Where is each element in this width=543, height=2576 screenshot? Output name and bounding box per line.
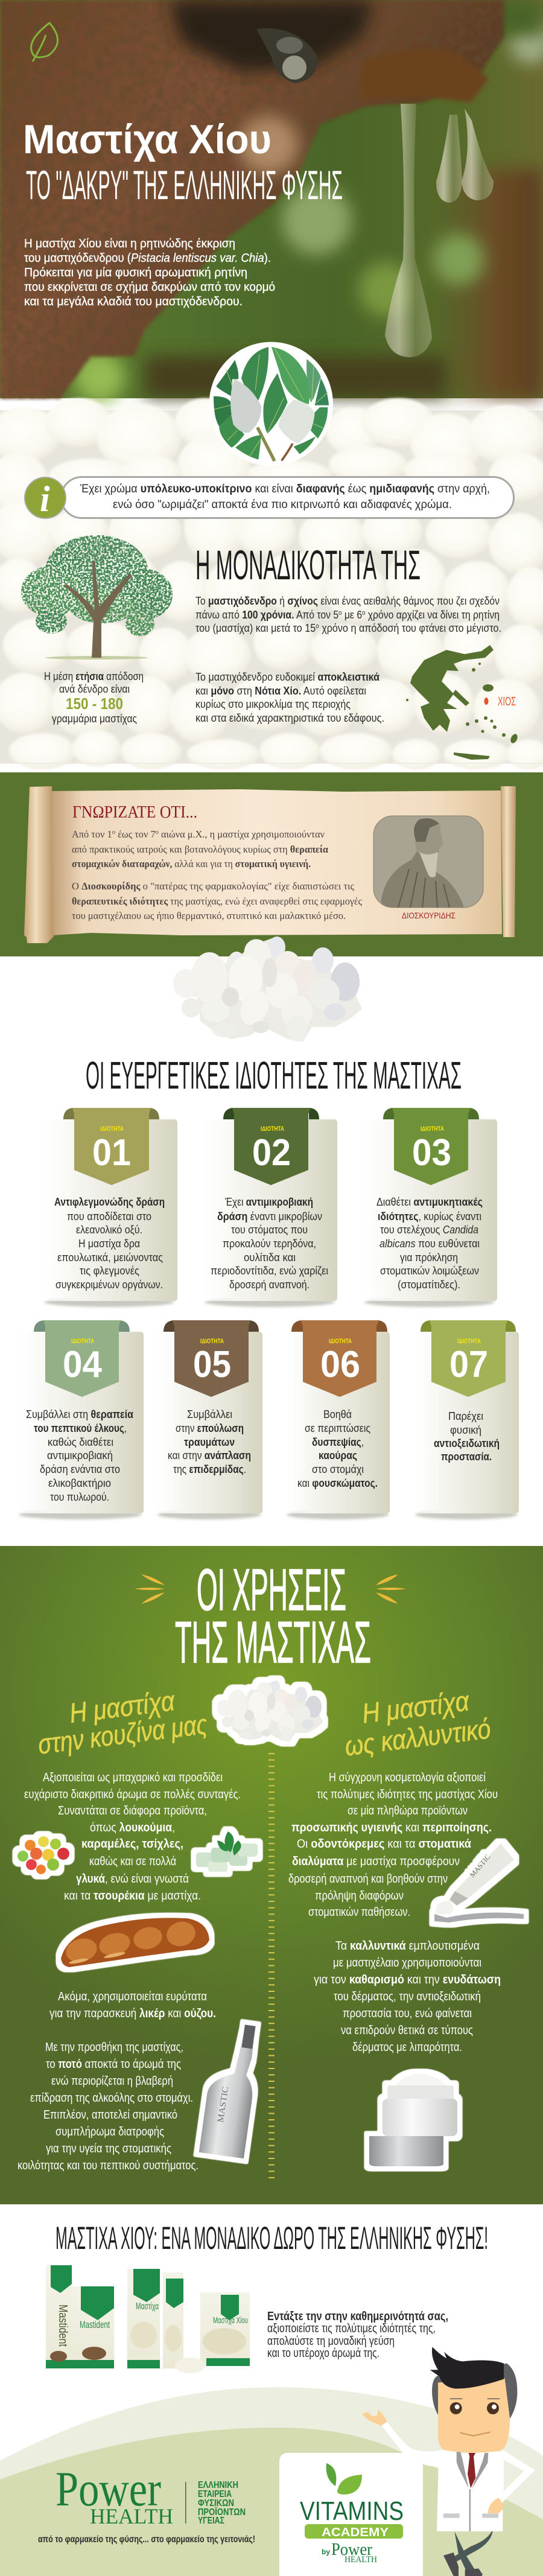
card 02: περιοδοντίτιδα, ενώ χαρίζει xyxy=(211,1265,328,1277)
card 04: ΙΔΙΟΤΗΤΑ xyxy=(71,1338,94,1345)
card 06: Βοηθά xyxy=(323,1408,352,1420)
call-to-action text: αξιοποιείστε τις πολύτιμες ιδιότητές της, xyxy=(267,2322,436,2335)
card 03: στοματικών λοιμώξεων xyxy=(380,1265,479,1277)
card 02: Έχει αντιμικροβιακή xyxy=(224,1196,313,1208)
Chios paragraph: Το μαστιχόδενδρο ευδοκιμεί αποκλειστικά xyxy=(195,671,379,683)
cosmetics text block: δέρματος με λιπαρότητα. xyxy=(352,2041,462,2054)
tree yield caption: ανά δένδρο είναι xyxy=(59,683,130,695)
kitchen text block: καθώς και σε πολλά xyxy=(89,1855,176,1868)
card 04: του πυλωρού. xyxy=(50,1491,109,1503)
card 02: δροσερή αναπνοή. xyxy=(229,1279,310,1291)
card 01: που αποδίδεται στο xyxy=(67,1210,151,1223)
product boxes: Μαστίχα xyxy=(136,2301,159,2312)
icon: cream jar xyxy=(369,2074,457,2166)
card 02: του στόματος που xyxy=(231,1224,308,1236)
card 04: του πεπτικού έλκους, xyxy=(34,1422,127,1434)
Power Health logo: ΕΤΑΙΡΕΙΑ xyxy=(198,2489,232,2499)
Vitamins Academy panel: Pοwer xyxy=(331,2540,372,2559)
cosmetics text block: προσωπικής υγιεινής και περιποίησης. xyxy=(291,1821,492,1834)
parchment scroll: ο xyxy=(112,828,115,836)
card 07: φυσική xyxy=(450,1424,481,1436)
kitchen text block: ενώ περιορίζεται η βλαβερή xyxy=(51,2075,173,2088)
card 03: Διαθέτει αντιμυκητιακές xyxy=(376,1196,483,1208)
card 04: Συμβάλλει στη θεραπεία xyxy=(26,1408,133,1420)
card 05: Συμβάλλει xyxy=(187,1408,232,1420)
tree yield caption: 150 - 180 xyxy=(66,695,123,713)
kitchen text block: και τα τσουρέκια με μαστίχα. xyxy=(64,1889,201,1903)
icon: tsoureki bread xyxy=(61,1918,209,1967)
card 01: ΙΔΙΟΤΗΤΑ xyxy=(100,1125,124,1133)
cosmetics text block xyxy=(288,1771,501,2054)
card 06: σε περιπτώσεις xyxy=(305,1422,370,1434)
kitchen text block: όπως λουκούμια, xyxy=(90,1821,175,1834)
Vitamins Academy panel: by xyxy=(322,2548,330,2556)
info callout pill: i xyxy=(40,479,50,519)
parchment scroll: Ο Διοσκουρίδης ο "πατέρας της φαρμακολογίας" είχε διαπιστώσει τις xyxy=(72,880,354,892)
kitchen text block: Αξιοποιείται ως μπαχαρικό και προσδίδει xyxy=(43,1771,223,1784)
cosmetics text block: με μαστιχέλαιο χρησιμοποιούνται xyxy=(333,1956,481,1970)
cosmetics text block: Οι οδοντόκρεμες και τα στοματικά xyxy=(297,1837,472,1851)
cosmetics text block: για τον καθαρισμό και την ενυδάτωση xyxy=(314,1973,501,1986)
card 01: ελεανολικό οξύ. xyxy=(76,1224,142,1236)
icon: chewing gum and mint xyxy=(196,1831,258,1872)
cosmetics text block: τις πολύτιμες ιδιότητες της μαστίχας Χίου xyxy=(317,1788,498,1801)
cosmetics text block: σε μία πληθώρα προϊόντων xyxy=(348,1804,468,1818)
product boxes: Mastident xyxy=(80,2319,110,2330)
Power Health logo: Pοwer xyxy=(56,2461,161,2516)
handwritten title: cosmetic: ως καλλυντικό xyxy=(343,1713,492,1762)
kitchen text block: ευχάριστο διακριτικό άρωμα σε πολλές συνταγές. xyxy=(24,1788,241,1801)
decorative yellow rays xyxy=(135,1574,406,1604)
kitchen text block: το ποτό αποκτά το άρωμά της xyxy=(46,2058,181,2071)
card 04: αντιμικροβιακή xyxy=(47,1449,113,1461)
call-to-action text: και το υπέροχο άρωμά της. xyxy=(267,2347,379,2360)
uniqueness paragraph: Το μαστιχόδενδρο ή σχίνος είναι ένας αειθαλής θάμνος που ζει σχεδόν xyxy=(195,595,500,607)
Vitamins Academy panel: HEALTH xyxy=(345,2555,377,2565)
card 02: προκαλούν τερηδόνα, xyxy=(223,1238,316,1250)
Power Health logo: ΠΡΟΪΟΝΤΩΝ xyxy=(198,2507,246,2517)
map of Greece: ΧΙΟΣ xyxy=(498,695,516,708)
call-to-action text: Εντάξτε την στην καθημερινότητά σας, xyxy=(267,2310,448,2323)
card 04: καθώς διαθέτει xyxy=(48,1436,113,1448)
icon: leaves and mastic crystals circle xyxy=(209,342,333,466)
kitchen text block: Με την προσθήκη της μαστίχας, xyxy=(45,2041,183,2054)
card 03: albicans που ευθύνεται xyxy=(379,1238,480,1250)
card 07: αντιοξειδωτική xyxy=(434,1437,500,1450)
Vitamins Academy panel xyxy=(279,2453,423,2576)
mastic pile sticker xyxy=(217,1680,323,1741)
card 05: και στην ανάπλαση xyxy=(168,1449,251,1461)
mastic texture background xyxy=(0,398,543,769)
icon: toothpaste tube and brush: MASTIC xyxy=(468,1852,492,1879)
card 05 xyxy=(156,1320,262,1519)
tree yield caption: Η μέση ετήσια απόδοση xyxy=(44,670,144,682)
uniqueness paragraph: με 6 xyxy=(342,609,362,621)
card 07: προστασία. xyxy=(441,1451,492,1463)
Power Health logo: HEALTH xyxy=(90,2504,173,2528)
kitchen text block: για την παρασκευή λικέρ και ούζου. xyxy=(49,2007,216,2020)
info callout pill: ενώ όσο "ωριμάζει" αποκτά ένα πιο κιτρινωπό και αδιαφανές χρώμα. xyxy=(113,498,452,511)
uniqueness paragraph xyxy=(195,595,501,634)
tagline: από το φαρμακείο της φύσης... στο φαρμακείο της γειτονιάς! xyxy=(38,2534,255,2545)
card 01: επουλωτικά, μειώνοντας xyxy=(57,1251,163,1264)
kitchen text block: επίδραση της αλκοόλης στο στομάχι. xyxy=(30,2091,193,2105)
uniqueness paragraph: ο xyxy=(316,623,319,630)
hero intro paragraph xyxy=(24,237,275,308)
product boxes: Mastident xyxy=(56,2304,69,2347)
icon: liqueur bottle: MASTIC xyxy=(216,2086,230,2123)
footer hills xyxy=(0,2387,543,2576)
icon: leaf logo xyxy=(31,23,58,62)
parchment scroll: αιώνα μ.Χ., η μαστίχα χρησιμοποιούνταν xyxy=(159,828,325,840)
card 03 xyxy=(361,1108,497,1307)
card 05: τραυμάτων xyxy=(184,1436,235,1448)
cosmetics text block: διαλύματα με μαστίχα προσφέρουν xyxy=(292,1855,460,1868)
hero title: Μαστίχα Χίου xyxy=(23,116,272,162)
card 03: 03 xyxy=(412,1132,451,1174)
card 04: δράση ενάντια στο xyxy=(40,1463,120,1475)
handwritten title: kitchen: στην κουζίνα μας xyxy=(36,1708,209,1760)
uniqueness paragraph: του (μαστίχα) και μετά το 15 xyxy=(195,622,329,634)
handwritten title: kitchen xyxy=(33,1681,209,1760)
central dashed divider xyxy=(268,1753,275,2178)
card 03: ΙΔΙΟΤΗΤΑ xyxy=(421,1125,444,1133)
map of Greece xyxy=(406,645,519,760)
card 01: Η μαστίχα δρα xyxy=(78,1238,140,1250)
Power Health logo: ΕΛΛΗΝΙΚΗ xyxy=(198,2480,238,2490)
parchment scroll: Από τον 1 xyxy=(72,828,113,840)
green uses panel xyxy=(0,1546,543,2204)
cosmetics text block: στοματικών παθήσεων. xyxy=(308,1906,410,1919)
card 07: ΙΔΙΟΤΗΤΑ xyxy=(457,1338,481,1345)
icon: mastic tree xyxy=(21,535,173,660)
card 02: δράση έναντι μικροβίων xyxy=(217,1210,322,1223)
portrait of Dioscorides: ΔΙΟΣΚΟΥΡΙΔΗΣ xyxy=(402,911,456,920)
card 05: ΙΔΙΟΤΗΤΑ xyxy=(200,1338,224,1345)
Chios paragraph: κυρίως στο μικροκλίμα της περιοχής xyxy=(195,698,351,710)
portrait of Dioscorides xyxy=(373,816,483,920)
info callout pill: Έχει χρώμα υπόλευκο-υποκίτρινο και είναι διαφανής έως ημιδιαφανής στην αρχή, xyxy=(80,483,490,495)
card 02 xyxy=(202,1108,337,1307)
Vitamins Academy panel: ACADEMY xyxy=(322,2526,389,2539)
parchment scroll: ΓΝΩΡΙΖΑΤΕ ΟΤΙ... xyxy=(72,803,197,822)
parchment scroll: έως τον 7 xyxy=(115,828,156,840)
kitchen text block: Συναντάται σε διάφορα προϊόντα, xyxy=(58,1804,207,1818)
cosmetics text block: Τα καλλυντικά εμπλουτισμένα xyxy=(335,1939,480,1953)
hero intro paragraph: Η μαστίχα Χίου είναι η ρητινώδης έκκριση xyxy=(24,237,235,250)
hero intro paragraph: και τα μεγάλα κλαδιά του μαστιχόδενδρου. xyxy=(24,295,243,308)
kitchen text block: για την υγεία της στοματικής xyxy=(46,2142,171,2155)
Vitamins Academy panel: VITAMINS xyxy=(300,2496,404,2526)
cosmetics text block: Η σύγχρονη κοσμετολογία αξιοποιεί xyxy=(329,1771,486,1784)
info callout pill xyxy=(25,477,514,519)
call-to-action text: απολαύστε τη μοναδική γεύση xyxy=(267,2335,395,2348)
card 06: 06 xyxy=(320,1344,360,1385)
handwritten title: cosmetic: Η μαστίχα xyxy=(360,1685,472,1729)
cosmetics text block: προστασία του, ενώ φαίνεται xyxy=(343,2007,472,2020)
card 01: τις φλεγμονές xyxy=(80,1265,139,1277)
hero intro paragraph: του μαστιχόδενδρου (Pistacia lentiscus var. Chia). xyxy=(24,252,271,265)
kitchen text block xyxy=(17,1771,241,2172)
kitchen text block: Επιπλέον, αποτελεί σημαντικό xyxy=(43,2108,177,2122)
icon: resin drops xyxy=(256,28,494,357)
Power Health logo: ΥΓΕΙΑΣ xyxy=(198,2516,224,2526)
Chios paragraph: και μόνο στη Νότια Χίο. Αυτό οφείλεται xyxy=(195,685,366,697)
mastic pile photo xyxy=(173,935,362,1042)
card 07: Παρέχει xyxy=(448,1410,483,1422)
card 06 xyxy=(285,1320,390,1519)
uses heading xyxy=(175,1557,371,1675)
Chios paragraph xyxy=(195,671,384,724)
card 01: συγκεκριμένων οργάνων. xyxy=(56,1279,163,1291)
card 06: ΙΔΙΟΤΗΤΑ xyxy=(329,1338,352,1345)
card 01: Αντιφλεγμονώδης δράση xyxy=(54,1196,165,1208)
card 06: στο στομάχι xyxy=(312,1463,364,1475)
card 04: ελικοβακτήριο xyxy=(48,1477,111,1489)
card 06: καούρας xyxy=(319,1449,357,1461)
parchment scroll xyxy=(24,786,516,943)
uniqueness paragraph: χρόνο αρχίζει να δίνει τη ρητίνη xyxy=(365,609,500,621)
product boxes xyxy=(46,2265,250,2373)
card 05: 05 xyxy=(193,1344,231,1385)
tree yield caption xyxy=(44,670,144,725)
uniqueness paragraph: χρόνο η απόδοσή του φτάνει στο μέγιστο. xyxy=(319,622,501,634)
kitchen text block: καραμέλες, τσίχλες, xyxy=(81,1837,183,1851)
handwritten title: kitchen: Η μαστίχα xyxy=(68,1685,177,1729)
cosmetics text block: πρόληψη διαφόρων xyxy=(315,1889,404,1903)
Chios paragraph: και στα ειδικά χαρακτηριστικά του εδάφους. xyxy=(195,712,384,724)
hero intro paragraph: που εκκρίνεται σε σχήμα δακρύων από τον κορμό xyxy=(24,281,275,294)
kitchen text block: Ακόμα, χρησιμοποιείται ευρύτατα xyxy=(58,1990,207,2003)
card 02: ΙΔΙΟΤΗΤΑ xyxy=(261,1125,284,1133)
cosmetics text block: δροσερή αναπνοή και βοηθούν στην xyxy=(288,1872,448,1886)
card 05: της επιδερμίδας. xyxy=(173,1463,246,1475)
card 01 xyxy=(42,1108,177,1307)
green history band xyxy=(0,772,543,956)
handwritten title: cosmetic xyxy=(339,1683,492,1762)
hero intro paragraph: Πρόκειται για μία φυσική αρωματική ρητίνη xyxy=(24,266,247,279)
card 07: 07 xyxy=(449,1344,488,1385)
uses heading: ΟΙ ΧΡΗΣΕΙΣ xyxy=(197,1557,346,1623)
card 06: δυσπεψίας, xyxy=(312,1436,364,1448)
Power Health logo xyxy=(56,2461,246,2528)
parchment scroll: στομαχικών διαταραχών, αλλά και για τη στοματική υγιεινή. xyxy=(72,858,311,870)
card 03: για πρόκληση xyxy=(400,1251,458,1264)
cosmetics text block: του δέρματος, την αντιοξειδωτική xyxy=(334,1990,481,2003)
card 04 xyxy=(17,1320,144,1519)
doctor character xyxy=(362,2347,535,2576)
card 02: ουλίτιδα και xyxy=(244,1251,296,1264)
cosmetics text block: να επιδρούν θετικά σε τύπους xyxy=(341,2024,473,2037)
icon: toothpaste tube and brush xyxy=(434,1843,524,1922)
card 07 xyxy=(414,1320,519,1519)
card 01: 01 xyxy=(92,1132,131,1174)
product boxes: Μαστίχα Χίου xyxy=(213,2315,248,2326)
card 06: και φουσκώματος. xyxy=(297,1477,378,1489)
Power Health logo: ΦΥΣΙΚΩΝ xyxy=(198,2498,234,2508)
uniqueness paragraph: ο xyxy=(338,609,342,617)
kitchen text block: γλυκά, ενώ είναι γνωστά xyxy=(76,1872,189,1886)
tree yield caption: γραμμάρια μαστίχας xyxy=(52,713,137,725)
parchment scroll: θεραπευτικές ιδιότητες της μαστίχας, ενώ έχει αναφερθεί στις εφαρμογές xyxy=(72,895,362,907)
parchment scroll: ο xyxy=(156,828,159,836)
uniqueness paragraph: ο xyxy=(362,609,365,617)
icon: liqueur bottle xyxy=(199,2021,262,2158)
card 04: 04 xyxy=(63,1344,102,1385)
call-to-action text xyxy=(267,2310,448,2360)
card 05: στην επούλωση xyxy=(176,1422,244,1434)
kitchen text block: κοιλότητας και του πεπτικού συστήματος. xyxy=(17,2159,198,2172)
card 03: (στοματίτιδες). xyxy=(398,1279,460,1291)
uniqueness paragraph: πάνω από 100 χρόνια. Από τον 5 xyxy=(195,609,345,621)
card 03: ιδιότητες, κυρίως έναντι xyxy=(378,1210,481,1223)
icon: candies xyxy=(17,1836,69,1874)
card 02: 02 xyxy=(252,1132,291,1174)
card 03: του στελέχους Candida xyxy=(380,1224,478,1236)
parchment scroll: από πρακτικούς ιατρούς και βοτανολόγους κυρίως στη θεραπεία xyxy=(72,844,328,855)
hero photo background xyxy=(0,0,543,402)
kitchen text block: συμπλήρωμα διατροφής xyxy=(56,2125,164,2139)
parchment scroll: του μαστιχέλαιου ως ήπιο θερμαντικό, στυπτικό και μαλακτικό μέσο. xyxy=(72,910,346,921)
